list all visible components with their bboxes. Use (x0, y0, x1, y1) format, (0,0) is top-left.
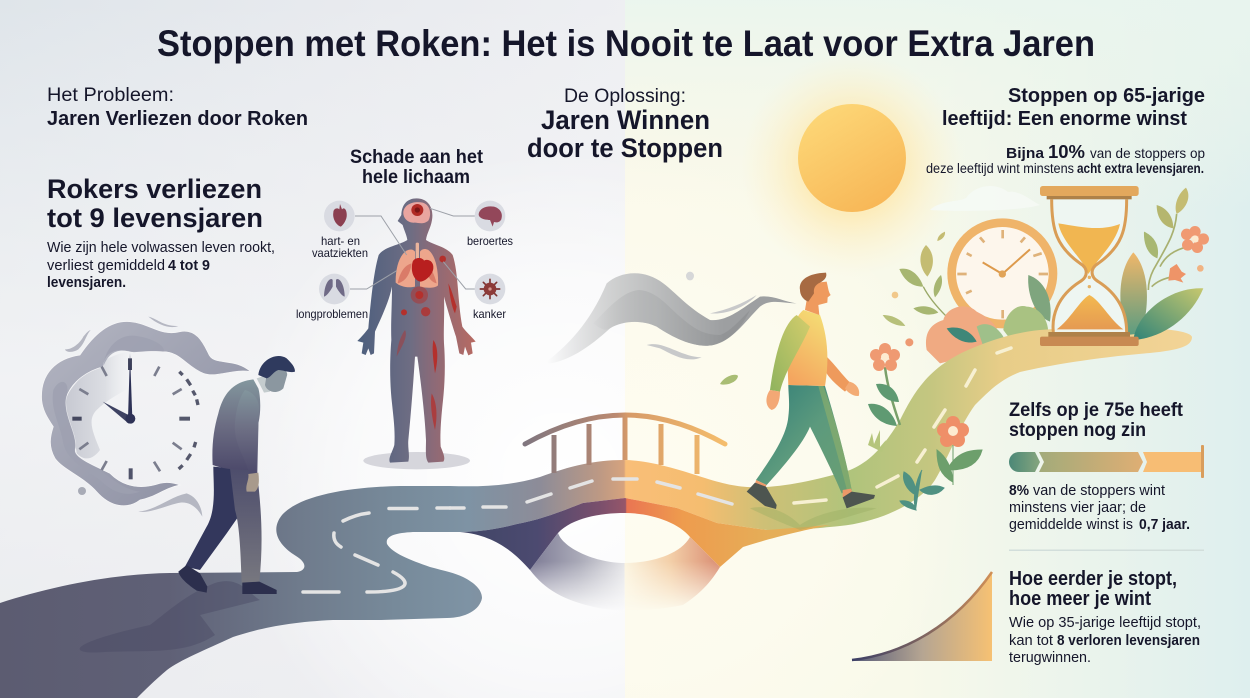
text block: stoppen op 65-jarige leeftijd: Bijna (1006, 145, 1045, 162)
road centre dashes (303, 348, 1011, 592)
body labels: longproblemen (296, 307, 368, 321)
body labels: hart- en (321, 234, 360, 248)
text block and progress bar: zelfs op je 75e: 8% (1009, 483, 1029, 499)
text block: hoe eerder je stopt (1009, 568, 1201, 666)
text block and progress bar: zelfs op je 75e: 0,7 jaar. (1139, 517, 1190, 533)
heading: de oplossing (527, 85, 723, 163)
damage spots (397, 256, 457, 430)
text block: rokers verliezen tot 9 levensjaren (47, 174, 275, 291)
falling leaf (720, 375, 738, 385)
text block and progress bar: zelfs op je 75e: van de stoppers wint (1033, 483, 1165, 499)
text block: hoe eerder je stopt: hoe meer je wint (1009, 588, 1151, 610)
shadow under defeated walker (80, 581, 260, 653)
heading: schade aan het hele lichaam (350, 147, 484, 188)
icon: lungs (319, 274, 350, 304)
text block: hoe eerder je stopt: kan tot (1009, 633, 1053, 649)
left heading: het probleem: Jaren Verliezen door Roken (47, 108, 308, 130)
clock and plants behind the path (883, 223, 1053, 363)
bridge railing (525, 415, 725, 474)
body labels: kanker (473, 307, 506, 321)
heading: de oplossing: De Oplossing: (564, 85, 686, 107)
text block: hoe eerder je stopt: 8 verloren levensjaren (1057, 633, 1200, 649)
connector lines (350, 208, 475, 289)
text block: stoppen op 65-jarige leeftijd: leeftijd: Een enorme winst (942, 108, 1187, 130)
heading: schade aan het hele lichaam: Schade aan het (350, 147, 484, 168)
text block: hoe eerder je stopt: Wie op 35-jarige leeftijd stopt, (1009, 615, 1201, 631)
text block and progress bar: zelfs op je 75e: minstens vier jaar; de (1009, 500, 1146, 516)
heading: schade aan het hele lichaam: hele lichaam (362, 167, 470, 188)
clock (952, 223, 1053, 324)
text block: rokers verliezen tot 9 levensjaren: Wie zijn hele volwassen leven rookt, (47, 239, 275, 256)
text block and progress bar: zelfs op je 75e: gemiddelde winst is (1009, 517, 1133, 533)
left heading: het probleem (47, 84, 308, 130)
text block: hoe eerder je stopt: Hoe eerder je stopt, (1009, 568, 1177, 590)
body labels (296, 234, 513, 321)
flower and plants along the path (868, 343, 982, 510)
man walking with head down (178, 356, 295, 594)
icon: heart (324, 201, 355, 231)
text block: stoppen op 65-jarige leeftijd: van de stoppers op (1090, 145, 1205, 161)
lungs (396, 243, 438, 288)
text block: rokers verliezen tot 9 levensjaren: verliest gemiddeld (47, 257, 165, 274)
left heading: het probleem: Het Probleem: (47, 84, 174, 106)
body diagram with organ damage and icons (319, 198, 505, 469)
smoke drifting from the walking man (543, 272, 797, 364)
text block: stoppen op 65-jarige leeftijd: Stoppen op 65-jarige (1008, 85, 1205, 107)
title: Stoppen met Roken: Het is Nooit te Laat voor Extra Jaren (157, 23, 1095, 64)
heading: de oplossing: Jaren Winnen (541, 105, 710, 135)
smoke swirling around the left clock (42, 317, 251, 517)
progress bar (1009, 445, 1204, 478)
heading: de oplossing: door te Stoppen (527, 133, 723, 163)
man walking upright (747, 273, 877, 530)
text block: stoppen op 65-jarige leeftijd: acht extra levensjaren. (1077, 161, 1204, 176)
road: winding path from dark to green (0, 327, 1192, 698)
text block: rokers verliezen tot 9 levensjaren: tot 9 levensjaren (47, 203, 263, 233)
flowers (1181, 226, 1209, 253)
body silhouette (357, 198, 476, 463)
leaves and bush at base of clock (926, 275, 1051, 363)
sun (798, 104, 906, 212)
left clock face ticks and hands (72, 353, 198, 479)
bridge arch (460, 498, 830, 610)
plants left of clock (883, 232, 947, 346)
hourglass (1040, 186, 1139, 346)
text block and progress bar: zelfs op je 75e (1009, 399, 1204, 533)
text block: stoppen op 65-jarige leeftijd (926, 85, 1205, 176)
heart (412, 258, 433, 282)
text block: rokers verliezen tot 9 levensjaren: 4 tot 9 (168, 257, 210, 274)
icon: brain (475, 201, 505, 231)
curve outline (852, 572, 992, 660)
rising curve chart (852, 572, 992, 661)
cloud (930, 186, 1040, 211)
text block: hoe eerder je stopt: terugwinnen. (1009, 650, 1091, 666)
text block and progress bar: zelfs op je 75e: Zelfs op je 75e heeft (1009, 399, 1183, 421)
text block and progress bar: zelfs op je 75e: stoppen nog zin (1009, 419, 1146, 441)
text block: rokers verliezen tot 9 levensjaren: levensjaren. (47, 274, 126, 291)
body labels: vaatziekten (312, 246, 368, 260)
text block: stoppen op 65-jarige leeftijd: deze leeftijd wint minstens (926, 161, 1074, 176)
brain damage (403, 202, 430, 223)
text block: rokers verliezen tot 9 levensjaren: Rokers verliezen (47, 174, 262, 204)
body labels: beroertes (467, 234, 513, 248)
hourglass and plants on the path (1040, 186, 1209, 346)
leaves right of hourglass (1120, 188, 1209, 340)
text block: stoppen op 65-jarige leeftijd: 10% (1048, 141, 1085, 162)
icon: virus cancer cell (475, 274, 505, 304)
